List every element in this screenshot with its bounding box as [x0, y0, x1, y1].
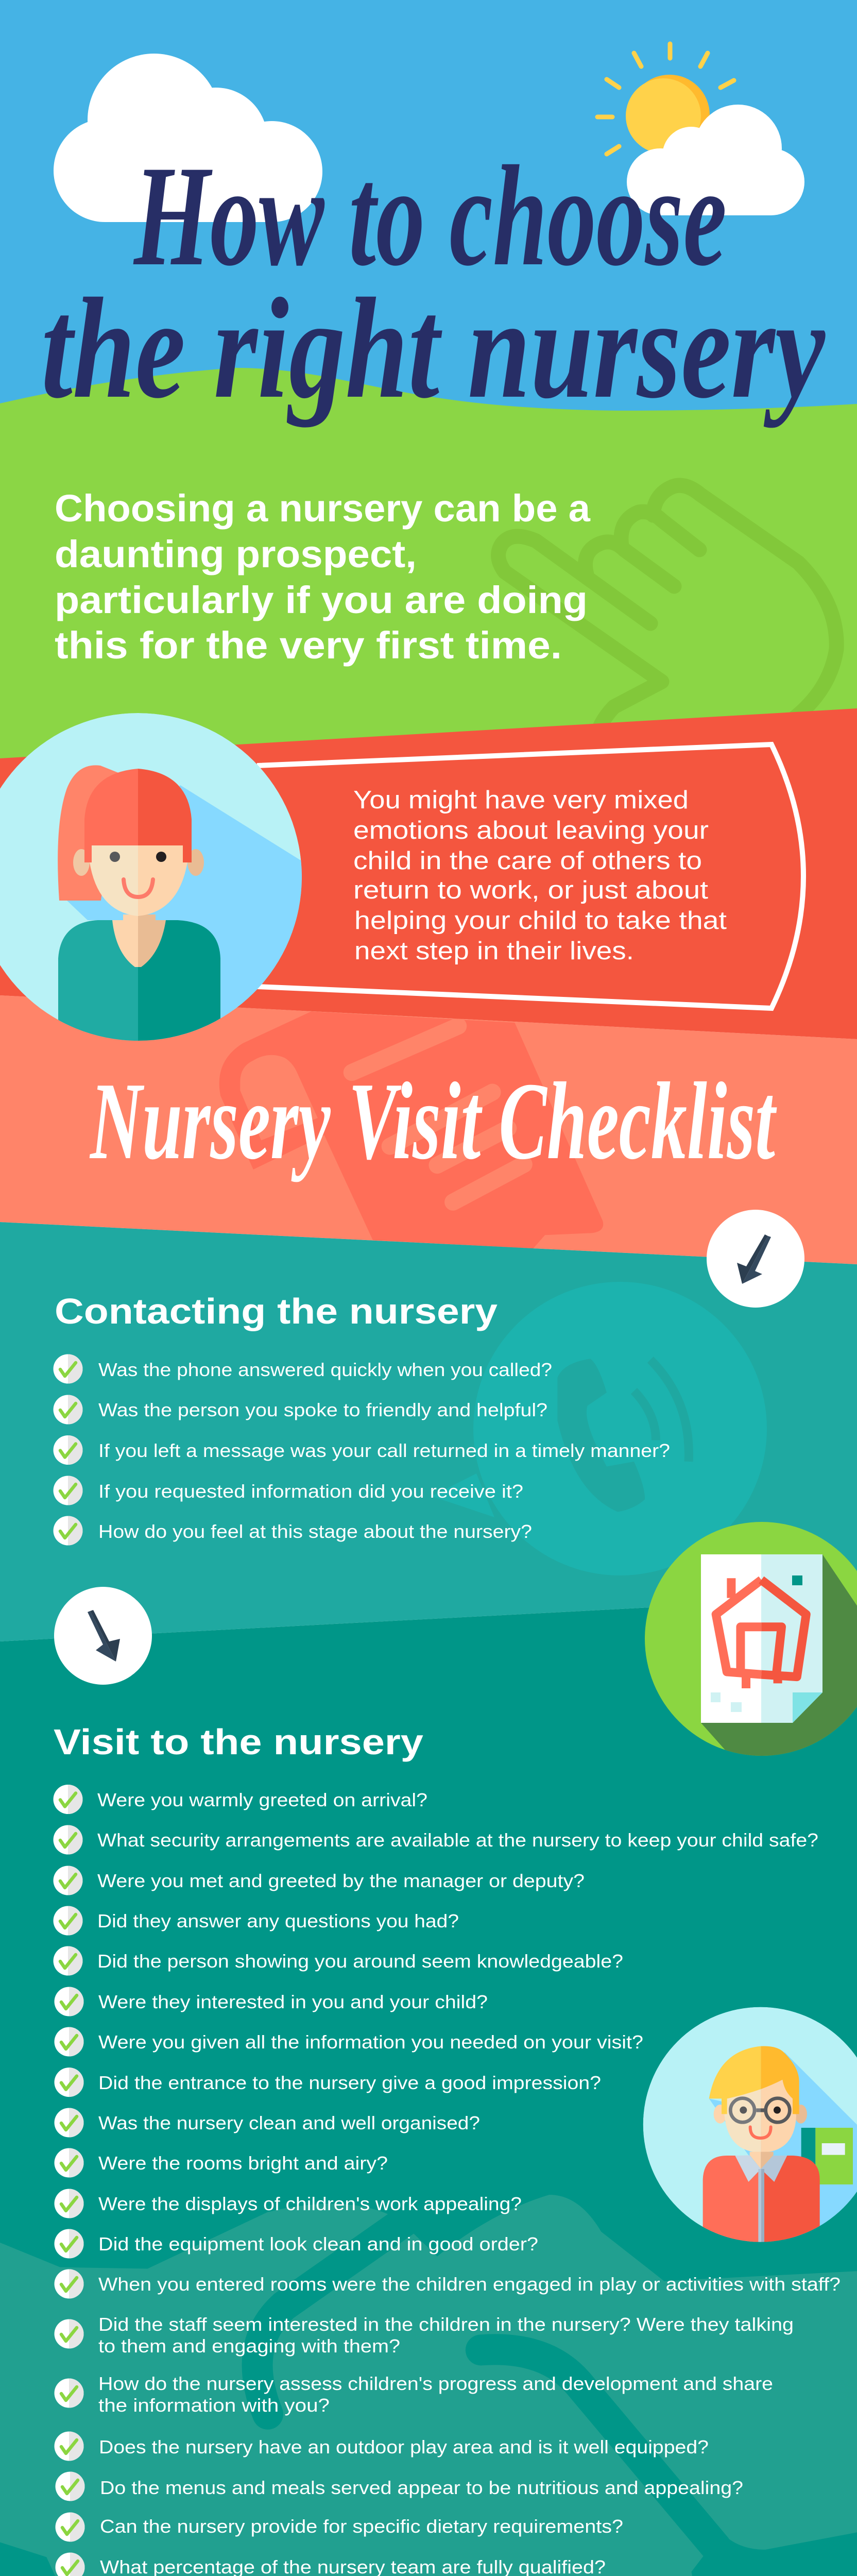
- watermark: phone in speech bubble: [432, 1282, 767, 1575]
- icon: teacher avatar with glasses and book: [643, 2007, 857, 2245]
- heading: Visit to the nursery: Visit to the nursery: [54, 1722, 423, 1762]
- checklist: contacting: If you left a message was your call returned in a timely manner?: [98, 1440, 670, 1461]
- intro text: particularly if you are doing: [55, 579, 588, 621]
- green hill: [0, 368, 857, 773]
- callout text: [353, 786, 727, 965]
- checklist: visit: Did the entrance to the nursery give a good impression?: [98, 2072, 601, 2093]
- panel: red intro band: [0, 708, 857, 1039]
- callout text: return to work, or just about: [353, 876, 708, 904]
- panel: contacting the nursery: [0, 1222, 857, 1641]
- icon: large cloud: [54, 54, 322, 222]
- checklist: visit: Was the nursery clean and well organised?: [98, 2112, 480, 2133]
- checklist: contacting: Was the phone answered quickly when you called?: [98, 1359, 552, 1380]
- panel: visit to the nursery: [0, 1597, 857, 2576]
- intro text: daunting prospect,: [55, 533, 417, 575]
- intro text: Choosing a nursery can be a: [55, 487, 591, 530]
- checklist: visit: Were the displays of children's work appealing?: [98, 2193, 522, 2214]
- panel: salmon checklist band: [0, 995, 857, 1264]
- checklist: visit: Can the nursery provide for specific dietary requirements?: [100, 2516, 623, 2537]
- watermark: hand outline: [499, 485, 836, 729]
- callout text: child in the care of others to: [353, 847, 702, 875]
- checklist: visit: Did the equipment look clean and in good order?: [98, 2233, 538, 2255]
- icon: small cloud: [627, 105, 804, 215]
- icon: woman avatar with red hair: [0, 713, 302, 1041]
- watermark: clipboard: [219, 1011, 603, 1248]
- callout text: next step in their lives.: [354, 937, 634, 965]
- checklist: visit: Were you met and greeted by the manager or deputy?: [97, 1870, 585, 1891]
- checklist: visit: Were you given all the information you needed on your visit?: [98, 2031, 643, 2053]
- icon: down arrow badge 1: [707, 1210, 804, 1308]
- checklist: visit: Were you warmly greeted on arrival?: [97, 1789, 427, 1810]
- checklist: contacting: If you requested information did you receive it?: [98, 1481, 523, 1502]
- checklist: contacting: Was the person you spoke to friendly and helpful?: [98, 1399, 547, 1420]
- watermark: hand shape: [0, 2195, 857, 2576]
- checklist: visit: Were they interested in you and your child?: [98, 1991, 488, 2012]
- checklist: visit: Did they answer any questions you had?: [97, 1910, 459, 1931]
- icon: sun: [597, 44, 734, 155]
- checklist: visit: Were the rooms bright and airy?: [98, 2153, 388, 2174]
- callout text: You might have very mixed: [353, 786, 689, 814]
- title: [41, 135, 826, 428]
- checklist: visit: When you entered rooms were the children engaged in play or activities with staff?: [98, 2274, 841, 2295]
- checklist: visit: to them and engaging with them?: [98, 2335, 400, 2357]
- checklist: visit: the information with you?: [98, 2395, 330, 2416]
- intro text: [55, 487, 591, 667]
- callout text: helping your child to take that: [354, 907, 727, 935]
- checklist: visit: Do the menus and meals served appear to be nutritious and appealing?: [100, 2477, 743, 2498]
- callout text: emotions about leaving your: [353, 817, 709, 844]
- checklist: contacting: [54, 1354, 670, 1546]
- heading: Contacting the nursery: Contacting the nursery: [55, 1291, 498, 1331]
- sky background: [0, 0, 857, 773]
- checklist: visit: Did the person showing you around seem knowledgeable?: [97, 1951, 623, 1972]
- checklist: visit: What security arrangements are available at the nursery to keep your child safe?: [97, 1829, 818, 1851]
- callout frame: [257, 744, 803, 1008]
- checklist: visit: Did the staff seem interested in the children in the nursery? Were they talking: [98, 2314, 794, 2335]
- checklist: visit: [54, 1785, 841, 2576]
- checklist: visit: Does the nursery have an outdoor play area and is it well equipped?: [99, 2436, 709, 2458]
- intro text: this for the very first time.: [55, 624, 562, 667]
- checklist: contacting: How do you feel at this stage about the nursery?: [98, 1521, 532, 1542]
- icon: down arrow badge 2: [54, 1587, 152, 1685]
- checklist: visit: How do the nursery assess children's progress and development and share: [98, 2373, 773, 2394]
- icon: house drawing on paper: [645, 1522, 857, 1756]
